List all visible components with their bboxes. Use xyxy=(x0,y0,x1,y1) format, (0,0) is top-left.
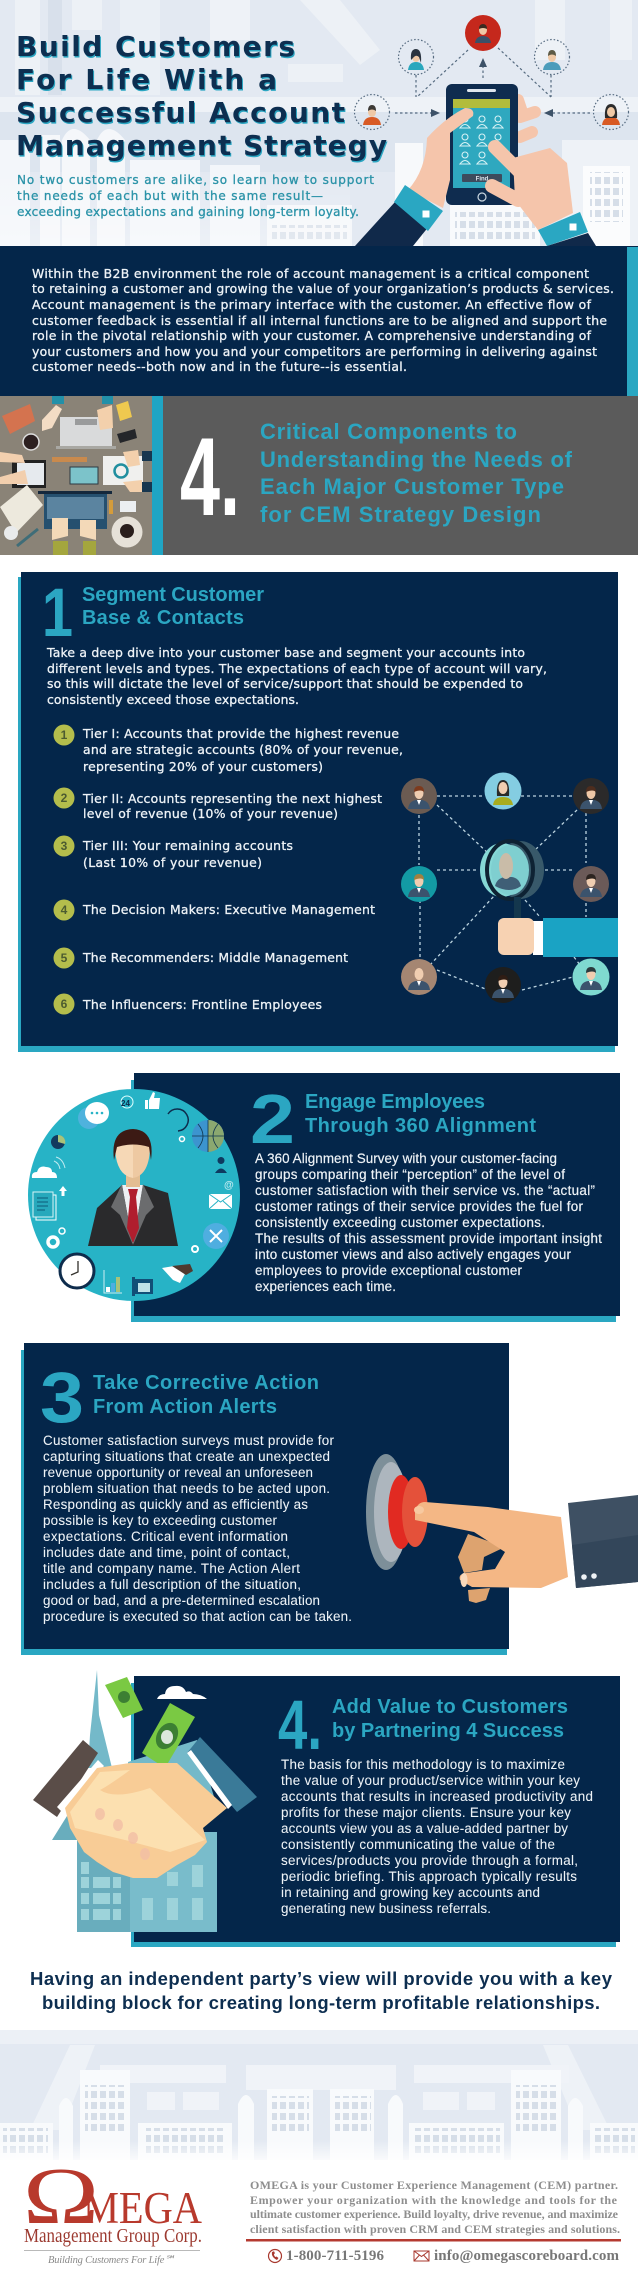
icon: pressing hand xyxy=(414,1495,638,1603)
body text: so this will dictate the level of service/support that should be expended to xyxy=(47,676,523,691)
building xyxy=(52,1740,217,1932)
closing statement xyxy=(30,1968,613,2013)
person 3 xyxy=(573,778,609,814)
email address: info@omegascoreboard.com xyxy=(434,2248,620,2264)
list of tiers: 5 xyxy=(61,951,68,965)
heading: Segment Customer xyxy=(82,584,264,606)
left hand and sleeve xyxy=(355,108,473,246)
body text: includes a full description of the situation, xyxy=(43,1577,301,1592)
list of tiers: 3 xyxy=(61,839,68,853)
businessman xyxy=(88,1129,178,1246)
list of tiers: (Last 10% of your revenue) xyxy=(83,855,262,870)
body text: Customer satisfaction surveys must provide for xyxy=(43,1433,335,1448)
person 5 xyxy=(573,866,609,902)
list of tiers: The Influencers: Frontline Employees xyxy=(82,997,322,1012)
heading xyxy=(93,1372,319,1418)
list of tiers: 2 xyxy=(61,791,68,805)
icon: globe xyxy=(192,1120,224,1152)
network illustration xyxy=(401,772,618,1003)
list of tiers xyxy=(54,724,403,1014)
icon: envelope xyxy=(414,2251,429,2261)
banner: critical components xyxy=(0,396,638,555)
phone: Find xyxy=(476,176,489,182)
body text: The results of this assessment provide important insight xyxy=(255,1231,602,1246)
body text: Take a deep dive into your customer base and segment your accounts into xyxy=(46,645,525,660)
person 7 xyxy=(485,967,521,1003)
list of tiers: representing 20% of your customers) xyxy=(83,759,323,774)
list of tiers: Tier II: Accounts representing the next highest xyxy=(82,791,382,806)
title: Build Customers xyxy=(16,30,295,63)
icon: flying bill xyxy=(105,1677,143,1718)
body text xyxy=(46,645,547,707)
body text: generating new business referrals. xyxy=(281,1901,491,1916)
list of tiers: level of revenue (10% of your revenue) xyxy=(83,806,338,821)
intro text: Account management is the primary interface with the customer. An effective flow of xyxy=(32,297,592,312)
heading: Add Value to Customers xyxy=(332,1696,568,1718)
logo: Omega Management Group: MEGA xyxy=(83,2183,202,2233)
intro text: Within the B2B environment the role of account management is a critical component xyxy=(32,266,589,281)
number 4: 4. xyxy=(278,1686,322,1764)
body text: employees to provide exceptional customer xyxy=(255,1263,523,1278)
body text: A 360 Alignment Survey with your customer-facing xyxy=(255,1151,557,1166)
icon: speech bubble xyxy=(78,1102,109,1129)
intro text: to retaining a customer and growing the value of your organization’s products & services. xyxy=(32,281,614,296)
panel 4: add value xyxy=(33,1670,620,1947)
heading: Take Corrective Action xyxy=(93,1372,319,1394)
panel 1: segment customer base xyxy=(18,572,618,1052)
heading: From Action Alerts xyxy=(93,1396,277,1418)
icon: bill in hands xyxy=(142,1703,195,1768)
icon: thumbs up xyxy=(145,1092,160,1109)
company description: ultimate customer experience. Build loyalty, drive revenue, and maximize xyxy=(250,2207,619,2221)
list of tiers: The Recommenders: Middle Management xyxy=(82,950,348,965)
icon: 24 hours: 24 xyxy=(121,1099,130,1108)
body text: consistently exceeding customer expectations. xyxy=(255,1215,545,1230)
banner heading: Understanding the Needs of xyxy=(260,447,573,472)
body text: title and company name. The Action Alert xyxy=(43,1561,300,1576)
icon: upload arrow xyxy=(59,1186,67,1196)
number 1: 1 xyxy=(42,574,73,651)
right sleeve xyxy=(187,1737,257,1812)
icon: customer top right xyxy=(534,40,570,74)
body text: capturing situations that create an unexpected xyxy=(43,1449,330,1464)
title xyxy=(16,30,388,164)
number 3: 3 xyxy=(40,1359,84,1438)
body text: procedure is executed so that action can be taken. xyxy=(43,1609,352,1624)
title: For Life With a xyxy=(17,64,278,98)
list of tiers: The Decision Makers: Executive Management xyxy=(82,902,375,917)
body text: in retaining and growing key accounts and xyxy=(281,1885,540,1900)
title: Successful Account xyxy=(17,98,346,130)
body text: the value of your product/service within your key xyxy=(281,1773,580,1788)
body text: includes date and time, point of contact, xyxy=(43,1545,290,1560)
closing statement: Having an independent party’s view will provide you with a key xyxy=(30,1968,613,1989)
intro text: customer needs--both now and in the future--is essential. xyxy=(32,359,407,374)
panel: introduction xyxy=(0,246,638,396)
icon: at sign: @ xyxy=(224,1180,234,1191)
icon: red button xyxy=(366,1454,428,1570)
panel 2: engage employees xyxy=(28,1073,620,1322)
back fingers xyxy=(518,100,535,137)
icon: customer right xyxy=(594,94,628,130)
intro text: your customers and how you and your competitors are performing in delivering against xyxy=(32,344,597,359)
body text: accounts view you as a value-added partner by xyxy=(281,1821,568,1836)
desk illustration xyxy=(0,396,152,555)
contact details xyxy=(268,2248,620,2264)
company description xyxy=(250,2178,620,2236)
body text: periodic briefing. This approach typically results xyxy=(281,1869,577,1884)
icon: cloud xyxy=(32,1167,57,1178)
dashed connectors xyxy=(395,48,590,113)
list of tiers: 1 xyxy=(61,728,68,742)
heading xyxy=(82,584,264,629)
body text: consistently communicating the value of the xyxy=(281,1837,555,1852)
closing statement: building block for creating long-term profitable relationships. xyxy=(42,1992,600,2013)
icon: customer top left xyxy=(398,40,434,74)
intro text: role in the pivotal relationship with your customer. A comprehensive understanding of xyxy=(32,328,592,343)
list of tiers: 4 xyxy=(61,903,68,917)
body text: into customer views and also actively engages your xyxy=(255,1247,572,1262)
icon: customer network with phone and hands xyxy=(354,15,628,246)
body text: good or bad, and a pre-determined escalation xyxy=(43,1593,320,1608)
banner heading: Each Major Customer Type xyxy=(260,474,564,499)
banner heading: for CEM Strategy Design xyxy=(260,502,541,527)
company description: Empower your organization with the knowledge and tools for the xyxy=(250,2193,618,2207)
icon: envelope xyxy=(209,1194,232,1209)
heading: Engage Employees xyxy=(305,1091,485,1113)
intro text: customer feedback is essential if all internal functions are to be aligned and support the xyxy=(32,313,607,328)
shaking hands xyxy=(65,1763,227,1878)
list of tiers: and are strategic accounts (80% of your revenue, xyxy=(83,742,403,757)
icon: gear right xyxy=(192,1246,198,1252)
spire xyxy=(88,1670,112,1768)
heading: Through 360 Alignment xyxy=(305,1115,536,1137)
subtitle: the needs of each but with the same result— xyxy=(17,189,323,203)
title: Build Customers xyxy=(17,32,296,64)
icon: gears xyxy=(48,1228,65,1247)
list of tiers: 6 xyxy=(61,997,68,1011)
body text: expectations. Critical event information xyxy=(43,1529,288,1544)
person 8 xyxy=(572,958,610,996)
icon: 24 hours xyxy=(121,1096,133,1108)
body text: possible is key to exceeding customer xyxy=(43,1513,278,1528)
title: For Life With a xyxy=(16,63,277,96)
icon: phone xyxy=(268,2250,282,2262)
phone xyxy=(446,84,518,205)
person 1 xyxy=(401,778,437,814)
title: Management Strategy xyxy=(17,130,388,164)
icon: bar chart xyxy=(104,1270,122,1293)
person 2 xyxy=(484,772,522,810)
number 2: 2 xyxy=(250,1080,295,1158)
subtitle: exceeding expectations and gaining long-term loyalty. xyxy=(17,205,359,219)
logo: Omega Management Group: Ω xyxy=(23,2153,99,2241)
phone number: 1-800-711-5196 xyxy=(286,2248,384,2264)
company description: client satisfaction with proven CRM and CEM strategies and solutions. xyxy=(250,2222,620,2236)
body text: revenue opportunity or reveal an unforeseen xyxy=(43,1465,313,1480)
body text: Responding as quickly and as efficiently as xyxy=(43,1497,308,1512)
body text: consistently exceed those expectations. xyxy=(47,692,299,707)
banner heading: Critical Components to xyxy=(260,419,517,444)
body text: customer satisfaction with their service vs. the “actual” xyxy=(255,1183,595,1198)
body text: services/products you provide through a formal, xyxy=(281,1853,578,1868)
subtitle xyxy=(17,173,374,219)
person 4 xyxy=(401,866,437,902)
heading xyxy=(305,1091,536,1137)
banner heading xyxy=(260,419,573,527)
icon: document xyxy=(33,1192,56,1220)
icon: cloud xyxy=(157,1686,207,1699)
body text: profits for these major clients. Ensure your key xyxy=(281,1805,571,1820)
body text: problem situation that needs to be acted upon. xyxy=(43,1481,330,1496)
person 6 xyxy=(401,959,437,995)
list of tiers: Tier III: Your remaining accounts xyxy=(82,838,293,853)
icon: desk phone xyxy=(132,1277,153,1296)
logo: Omega Management Group: Management Group Corp. xyxy=(24,2225,202,2247)
title: Successful Account xyxy=(16,96,345,129)
panel 3: corrective action xyxy=(21,1343,638,1655)
big number 4: 4. xyxy=(180,415,240,539)
body text: groups comparing their “perception” of the level of xyxy=(255,1167,565,1182)
left sleeve xyxy=(33,1740,98,1817)
list of tiers: Tier I: Accounts that provide the highest revenue xyxy=(82,726,399,741)
icon: person xyxy=(215,1157,227,1173)
body text: customer ratings of their service provides the fuel for xyxy=(255,1199,584,1214)
intro text xyxy=(32,266,614,374)
arrow heads xyxy=(431,58,553,117)
footer cityscape xyxy=(0,2030,638,2165)
circle illustration xyxy=(28,1089,240,1301)
body text: experiences each time. xyxy=(255,1279,396,1294)
icon: wifi xyxy=(54,1157,65,1169)
body text: accounts that results in increased productivity and xyxy=(281,1789,593,1804)
body text xyxy=(281,1757,593,1916)
logo: Omega Management Group xyxy=(23,2153,202,2266)
hand and sleeve xyxy=(498,918,618,957)
icon: handshake xyxy=(162,1264,193,1283)
subtitle: No two customers are alike, so learn how to support xyxy=(17,173,374,187)
magnifying glass xyxy=(480,841,544,920)
icon: pie chart xyxy=(51,1135,65,1149)
hero background cityscape xyxy=(0,0,638,246)
heading: by Partnering 4 Success xyxy=(332,1720,564,1742)
title: Management Strategy xyxy=(16,129,387,162)
right hand and sleeve xyxy=(492,147,596,246)
icon: red customer xyxy=(465,15,501,51)
body text xyxy=(255,1151,602,1294)
company description: OMEGA is your Customer Experience Management (CEM) partner. xyxy=(250,2178,618,2192)
heading: Base & Contacts xyxy=(82,607,244,629)
icon: small gear xyxy=(180,1136,184,1142)
heading xyxy=(332,1696,568,1742)
body text: different levels and types. The expectations of each type of account will vary, xyxy=(47,661,547,676)
icon: undo arrow xyxy=(168,1109,188,1131)
body text: The basis for this methodology is to maximize xyxy=(281,1757,565,1772)
body text xyxy=(43,1433,352,1624)
logo: Omega Management Group: Building Customers For Life℠ xyxy=(48,2255,175,2266)
icon: customer left xyxy=(354,94,390,130)
handshake and building illustration xyxy=(33,1670,257,1932)
icon: tools xyxy=(203,1223,229,1249)
icon: clock xyxy=(60,1254,94,1288)
